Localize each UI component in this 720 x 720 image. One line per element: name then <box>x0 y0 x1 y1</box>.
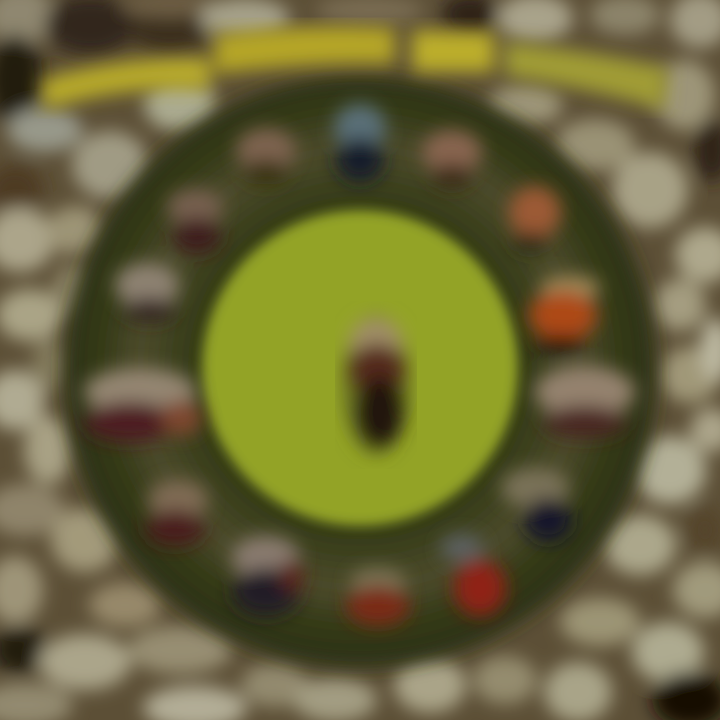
lime central disc <box>202 210 518 526</box>
beetle: blue top <box>334 104 386 182</box>
yellow band <box>40 26 668 110</box>
beetle: lower right blue <box>501 468 572 542</box>
beetle: large left <box>84 368 202 442</box>
beetle: bottom right red <box>440 534 506 616</box>
beetle: left upper <box>167 189 223 254</box>
beetle: bottom centre <box>346 568 410 626</box>
beetle: large right <box>535 366 635 438</box>
beetle: bottom left <box>232 536 304 616</box>
beetle: orange right <box>529 276 600 355</box>
central beetle <box>342 315 410 455</box>
beetle: upper left <box>236 128 296 184</box>
beetle: upper right <box>422 130 482 188</box>
beetle: right upper <box>509 186 561 252</box>
ring of beetles <box>84 104 635 626</box>
dark green ring <box>64 76 656 668</box>
beetle: left middle <box>115 263 179 322</box>
beetle: lower left <box>145 480 208 546</box>
